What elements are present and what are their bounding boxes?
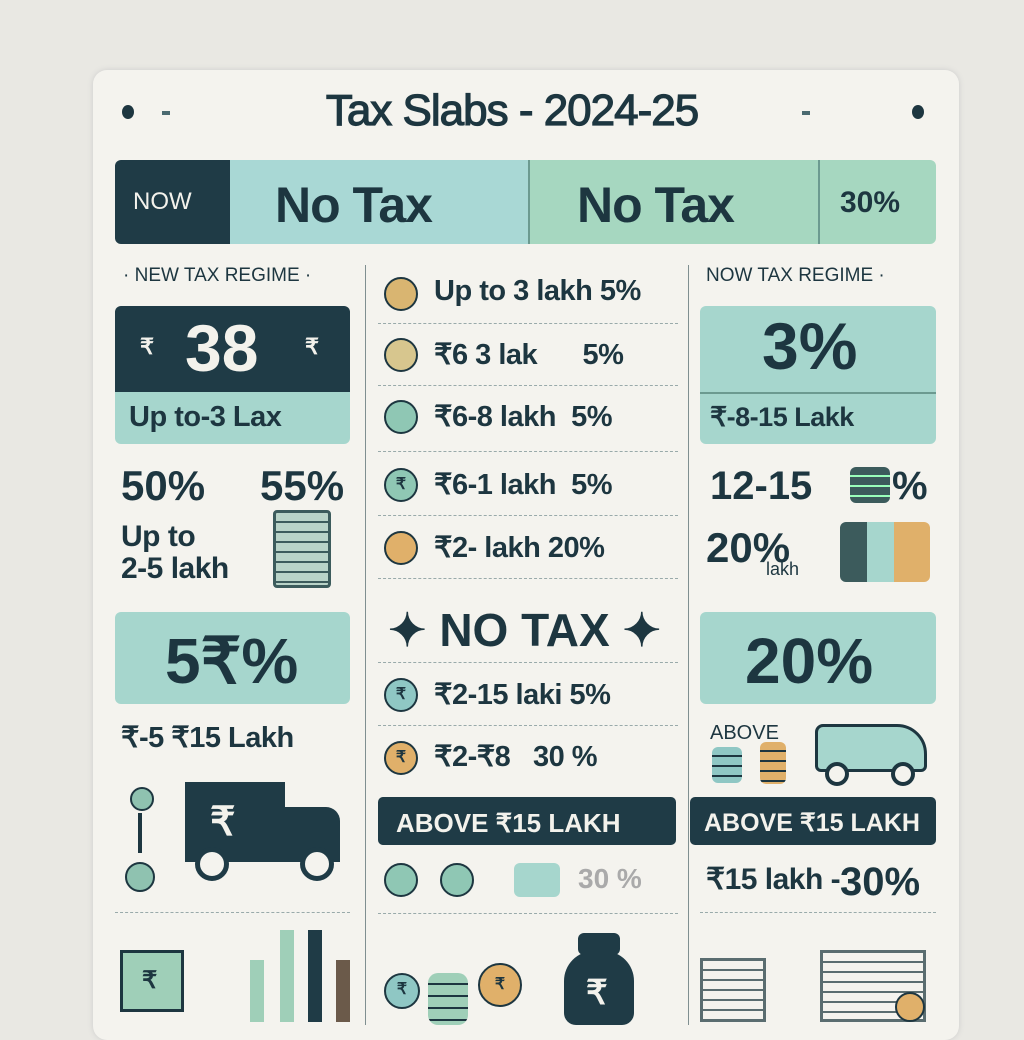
panel: right: NOW TAX REGIME · bbox=[706, 265, 885, 286]
card bbox=[93, 70, 959, 1040]
panel: right: 3% bbox=[762, 309, 857, 383]
panel: right: 12-15 bbox=[710, 464, 812, 508]
panel: middle rows: ₹ bbox=[396, 686, 406, 703]
panel: middle rows: ₹2- lakh 20% bbox=[434, 532, 604, 564]
banner bbox=[115, 160, 936, 244]
icon: banknote and bars: ₹ bbox=[142, 967, 157, 994]
panel: middle rows: ₹6-1 lakh 5% bbox=[434, 469, 612, 501]
panel: middle rows: ABOVE ₹15 LAKH bbox=[396, 808, 621, 838]
panel: right: ₹15 lakh - bbox=[706, 863, 840, 896]
banner: No Tax bbox=[275, 177, 432, 233]
panel: left: · NEW TAX REGIME · bbox=[123, 265, 311, 286]
panel: middle rows: ₹2-₹8 30 % bbox=[434, 741, 597, 773]
panel: middle rows: ✦ NO TAX ✦ bbox=[388, 604, 661, 656]
panel: right: ABOVE ₹15 LAKH bbox=[704, 809, 920, 837]
panel: middle rows: 30 % bbox=[578, 863, 642, 894]
icon: coins and money bag: ₹ bbox=[586, 974, 608, 1012]
panel: right: % bbox=[892, 464, 928, 508]
panel: right bbox=[690, 265, 936, 1022]
icon: car bbox=[815, 724, 927, 786]
panel: left: 2-5 lakh bbox=[121, 552, 229, 585]
icon: title ornaments bbox=[122, 105, 924, 119]
column dividers bbox=[365, 265, 366, 1025]
panel: right: 20% bbox=[745, 625, 873, 697]
panel: left: 38 bbox=[185, 311, 258, 385]
title: Tax Slabs - 2024-25 bbox=[326, 86, 698, 135]
banner: NOW bbox=[133, 188, 192, 215]
icon: coins and money bag: ₹ bbox=[495, 976, 505, 993]
banner: 30% bbox=[840, 186, 900, 219]
panel: middle rows: ₹6-8 lakh 5% bbox=[434, 401, 612, 433]
panel: left: Up to-3 Lax bbox=[129, 401, 281, 433]
icon: documents bbox=[700, 950, 926, 1022]
panel: left: 50% bbox=[121, 462, 205, 509]
panel: left: 5₹% bbox=[165, 625, 298, 697]
panel: left: ₹-5 ₹15 Lakh bbox=[121, 722, 294, 754]
icon: truck: ₹ bbox=[210, 800, 235, 844]
panel: left: Up to bbox=[121, 520, 195, 553]
panel: middle rows: ₹6 3 lak 5% bbox=[434, 339, 623, 371]
panel: right: lakh bbox=[766, 559, 799, 579]
icon: coins and money bag: ₹ bbox=[397, 981, 407, 998]
icon: banknote and bars bbox=[120, 930, 350, 1022]
panel: left: 55% bbox=[260, 462, 344, 509]
panel: middle rows: ₹ bbox=[396, 749, 406, 766]
panel: middle rows: ₹ bbox=[396, 476, 406, 493]
panel: left: ₹ bbox=[140, 334, 154, 359]
panel: middle rows bbox=[378, 275, 678, 1025]
panel: right: ABOVE bbox=[710, 722, 779, 744]
icon: coins and money bag bbox=[384, 933, 634, 1025]
icon: truck bbox=[125, 782, 340, 892]
panel: right: 30% bbox=[840, 860, 920, 904]
panel: left: ₹ bbox=[305, 334, 319, 359]
panel: right: ₹-8-15 Lakk bbox=[710, 402, 854, 432]
panel: left bbox=[115, 265, 350, 1022]
panel: middle rows: ₹2-15 laki 5% bbox=[434, 679, 610, 711]
panel: right: 20% bbox=[706, 524, 790, 571]
panel: middle rows: Up to 3 lakh 5% bbox=[434, 275, 641, 307]
banner: No Tax bbox=[577, 177, 734, 233]
icon: coin stack bbox=[273, 510, 331, 588]
